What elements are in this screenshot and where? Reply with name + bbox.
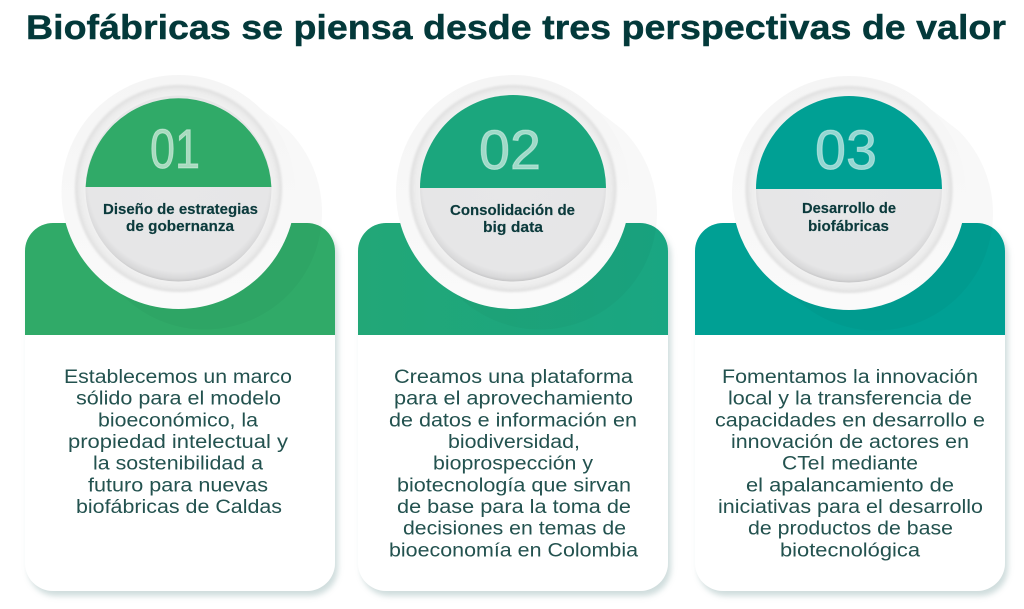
- badge heading 02: [450, 203, 575, 236]
- badge 02: [396, 75, 630, 309]
- body text 02: [389, 367, 638, 561]
- body text 02: biotecnología que sirvan: [397, 475, 631, 496]
- body text 01: biofábricas de Caldas: [76, 497, 282, 518]
- number 02: 02: [479, 118, 541, 181]
- body text 03: Fomentamos la innovación: [722, 367, 978, 388]
- long shadow 02: [430, 109, 657, 330]
- number 03: 03: [815, 118, 877, 181]
- body text 03: el apalancamiento de: [746, 475, 954, 496]
- body text 01: [64, 367, 292, 518]
- badge 03: [732, 76, 966, 310]
- long shadow 01: [95, 109, 322, 330]
- body text 03: local y la transferencia de: [728, 389, 972, 410]
- body text 03: CTeI mediante: [782, 454, 918, 475]
- card header 01: [25, 223, 335, 335]
- body text 02: bioprospección y: [433, 454, 594, 475]
- body text 01: la sostenibilidad a: [93, 454, 263, 475]
- body text 01: Establecemos un marco: [64, 367, 292, 388]
- card header 03: [695, 223, 1005, 335]
- body text 02: de base para la toma de: [397, 497, 631, 518]
- badge heading 03: biofábricas: [808, 219, 889, 235]
- body text 01: bioeconómico, la: [98, 410, 258, 431]
- long shadow 03: [766, 110, 993, 331]
- title: Biofábricas se piensa desde tres perspectivas de valor: [26, 9, 1006, 47]
- number 01: 01: [150, 117, 200, 180]
- badge heading 02: Consolidación de: [450, 203, 575, 219]
- panel: card 01 gobernanza: [25, 75, 335, 591]
- panel: card 03 biofabricas: [695, 76, 1005, 591]
- body text 01: sólido para el modelo: [76, 389, 281, 410]
- badge heading 01: [103, 202, 258, 235]
- panel: card 02 big data: [358, 75, 668, 591]
- body text 03: [715, 367, 985, 561]
- card body 01: [25, 223, 335, 591]
- body text 03: biotecnológica: [780, 540, 920, 561]
- body text 02: bioeconomía en Colombia: [389, 540, 638, 561]
- body text 02: de datos e información en: [389, 410, 637, 431]
- body text 02: decisiones en temas de: [403, 519, 626, 540]
- card body 03: [695, 223, 1005, 591]
- badge heading 03: [802, 201, 896, 235]
- body text 03: capacidades en desarrollo e: [715, 410, 985, 431]
- body text 03: innovación de actores en: [731, 432, 969, 453]
- body text 03: iniciativas para el desarrollo: [718, 497, 983, 518]
- body text 02: biodiversidad,: [448, 432, 580, 453]
- badge heading 01: de gobernanza: [126, 219, 235, 235]
- body text 02: Creamos una plataforma: [394, 367, 633, 388]
- body text 01: futuro para nuevas: [88, 475, 268, 496]
- badge heading 03: Desarrollo de: [802, 201, 896, 217]
- badge heading 01: Diseño de estrategias: [103, 202, 258, 218]
- badge heading 02: big data: [483, 220, 544, 236]
- body text 01: propiedad intelectual y: [68, 432, 289, 453]
- card header 02: [358, 223, 668, 335]
- card body 02: [358, 223, 668, 591]
- body text 03: de productos de base: [748, 519, 953, 540]
- body text 02: para el aprovechamiento: [394, 389, 633, 410]
- badge 01: [62, 75, 296, 309]
